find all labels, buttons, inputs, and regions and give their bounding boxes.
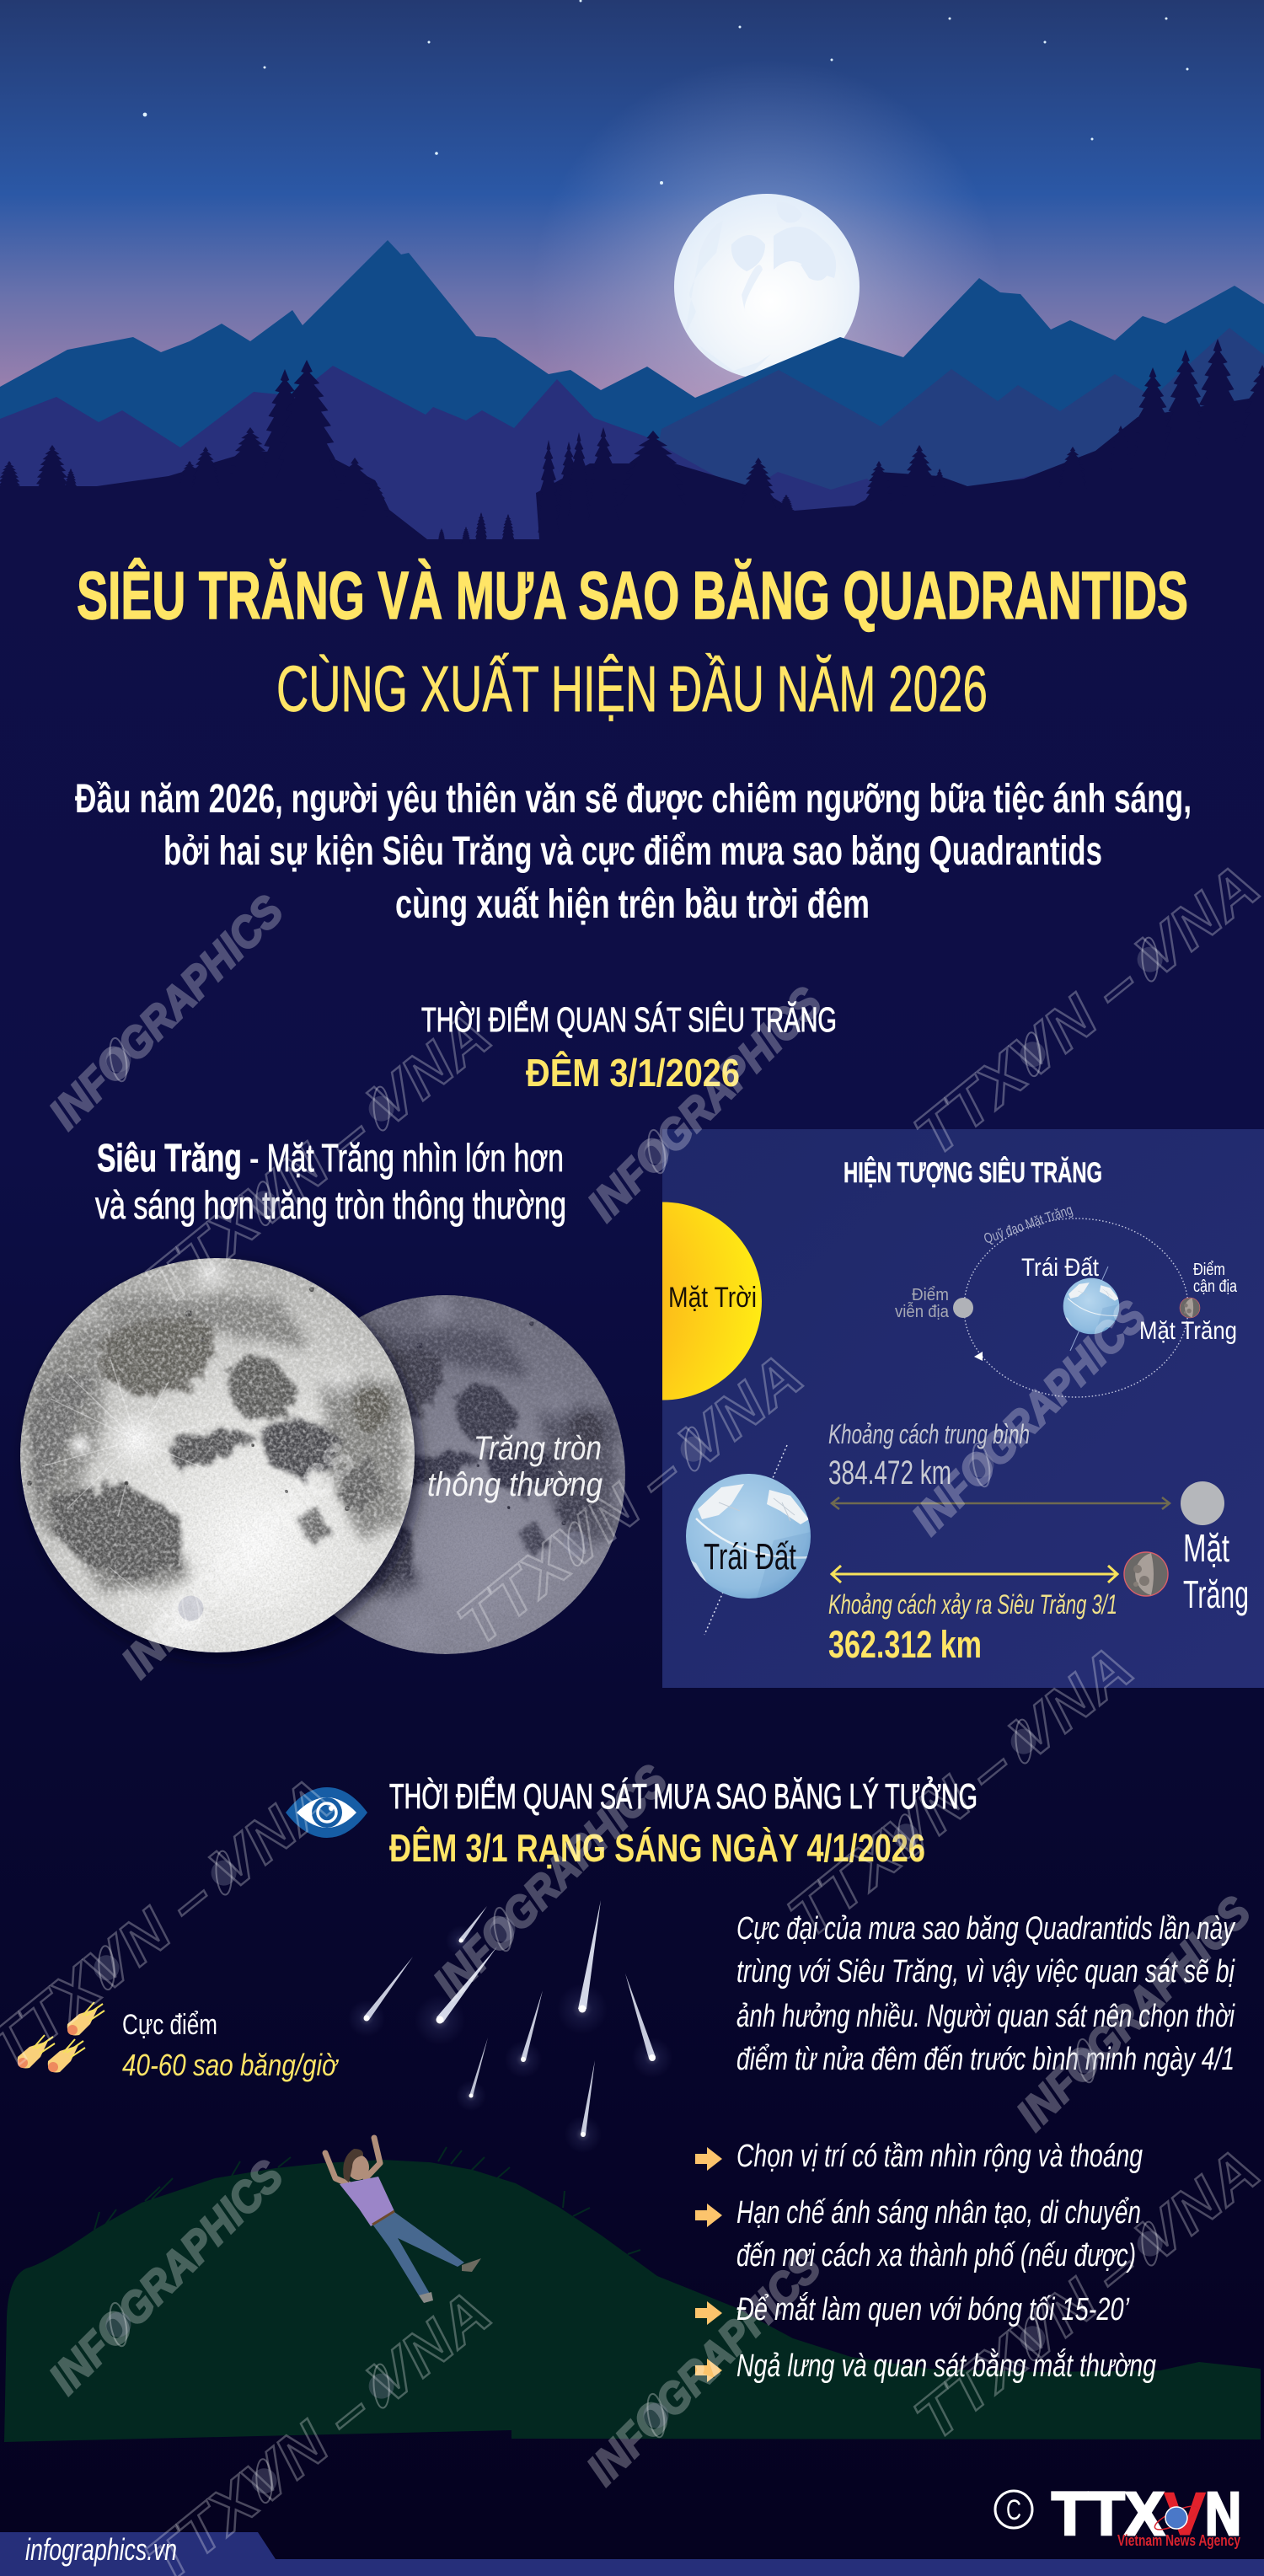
distance diagram bbox=[685, 1419, 1249, 1666]
peak rate label: Cực điểm bbox=[122, 2009, 217, 2041]
watermarks: INFOGRAPHICS bbox=[40, 2151, 292, 2403]
orbit diagram: viễn địa bbox=[895, 1302, 950, 1321]
label: normal full moon: thông thường bbox=[427, 1466, 603, 1503]
orbit diagram bbox=[895, 1202, 1238, 1397]
page background bbox=[0, 539, 1264, 2576]
right slate mountain range bbox=[640, 328, 1264, 539]
hero full moon bbox=[674, 194, 860, 379]
supermoon observation time heading: ĐÊM 3/1/2026 bbox=[526, 1051, 740, 1095]
watermarks: INFOGRAPHICS bbox=[903, 1292, 1155, 1544]
tips list bbox=[695, 2139, 1156, 2384]
person lying on the hill bbox=[325, 2138, 481, 2303]
distance diagram: Mặt bbox=[1183, 1526, 1229, 1570]
supermoon caption: và sáng hơn trăng tròn thông thường bbox=[95, 1183, 566, 1227]
meteor shower streaks bbox=[348, 1900, 672, 2153]
watermarks: INFOGRAPHICS bbox=[40, 886, 292, 1138]
footer band bbox=[0, 2532, 1264, 2576]
watermarks: INFOGRAPHICS bbox=[113, 1435, 365, 1687]
icon: sun: Mặt Trời bbox=[668, 1282, 757, 1314]
distance diagram: Khoảng cách xảy ra Siêu Trăng 3/1 bbox=[828, 1589, 1117, 1620]
icon: arrows bbox=[695, 2147, 722, 2382]
peak rate label bbox=[122, 2009, 340, 2082]
supermoon observation time heading bbox=[421, 999, 837, 1095]
title bbox=[77, 558, 1188, 726]
supermoon observation time heading: THỜI ĐIỂM QUAN SÁT SIÊU TRĂNG bbox=[421, 999, 837, 1039]
distance diagram: 384.472 km bbox=[828, 1454, 951, 1492]
label: normal full moon: Trăng tròn bbox=[474, 1430, 602, 1467]
meteor observation heading: ĐÊM 3/1 RẠNG SÁNG NGÀY 4/1/2026 bbox=[389, 1826, 925, 1870]
normal full moon photo bbox=[266, 1285, 625, 1663]
logo: TTXVN: V bbox=[1164, 2481, 1206, 2548]
logo: TTXVN bbox=[995, 2481, 1241, 2549]
orbit diagram: Mặt Trăng bbox=[1139, 1317, 1237, 1345]
green hill bbox=[4, 2147, 1261, 2442]
logo: TTXVN: N bbox=[1205, 2481, 1241, 2548]
meteor observation heading: THỜI ĐIỂM QUAN SÁT MƯA SAO BĂNG LÝ TƯỞNG bbox=[389, 1775, 977, 1816]
watermarks bbox=[0, 852, 1264, 2576]
left purple mountain range bbox=[0, 366, 1112, 539]
far blue mountain range bbox=[0, 240, 1264, 539]
stars bbox=[143, 0, 1189, 185]
tips text: đến nơi cách xa thành phố (nếu được) bbox=[736, 2238, 1136, 2273]
logo: TTXVN: TTX bbox=[1052, 2481, 1165, 2548]
forest silhouette bbox=[0, 339, 1264, 544]
label: normal full moon bbox=[427, 1430, 603, 1503]
icon: comets bbox=[18, 2002, 104, 2072]
watermarks: TTXVN – VNA bbox=[902, 852, 1264, 1169]
panel heading: HIỆN TƯỢNG SIÊU TRĂNG bbox=[844, 1157, 1102, 1189]
supermoon caption: Siêu Trăng - Mặt Trăng nhìn lớn hơn bbox=[97, 1136, 564, 1180]
watermarks: INFOGRAPHICS bbox=[579, 978, 831, 1230]
hero illustration: moonrise over mountains bbox=[0, 0, 1264, 544]
distance diagram: 362.312 km bbox=[828, 1623, 982, 1666]
footer band: infographics.vn bbox=[25, 2532, 177, 2567]
orbit diagram: Điểm bbox=[1193, 1261, 1225, 1279]
supermoon caption bbox=[95, 1136, 566, 1227]
tips text: Để mắt làm quen với bóng tối 15-20’ bbox=[736, 2291, 1129, 2327]
watermarks: TTXVN – VNA bbox=[446, 1342, 815, 1658]
meteor observation heading bbox=[389, 1775, 977, 1870]
watermarks: INFOGRAPHICS bbox=[425, 1756, 677, 2008]
watermarks: TTXVN – VNA bbox=[902, 2136, 1264, 2453]
distance diagram: Khoảng cách trung bình bbox=[828, 1419, 1030, 1449]
distance diagram: Trái Đất bbox=[704, 1536, 796, 1577]
orbit diagram: cận địa bbox=[1193, 1277, 1238, 1296]
orbit diagram: Quỹ đạo Mặt Trăng bbox=[982, 1202, 1074, 1247]
intro paragraph: cùng xuất hiện trên bầu trời đêm bbox=[395, 882, 870, 927]
logo: TTXVN: C bbox=[1006, 2494, 1021, 2526]
orbit diagram: Trái Đất bbox=[1021, 1254, 1100, 1282]
icon: sun bbox=[662, 1202, 762, 1400]
intro paragraph bbox=[75, 777, 1192, 927]
peak rate label: 40-60 sao băng/giờ bbox=[122, 2048, 340, 2082]
orbit diagram: Điểm bbox=[912, 1286, 949, 1304]
watermarks: TTXVN – VNA bbox=[776, 1634, 1145, 1951]
supermoon photo bbox=[20, 1247, 420, 1662]
icon: eye bbox=[286, 1787, 367, 1838]
watermarks: TTXVN – VNA bbox=[134, 1001, 503, 1318]
watermarks: INFOGRAPHICS bbox=[578, 2242, 830, 2494]
observation paragraph bbox=[736, 1911, 1235, 2077]
panel: supermoon phenomenon bbox=[662, 1129, 1264, 1688]
tips text bbox=[736, 2139, 1156, 2384]
